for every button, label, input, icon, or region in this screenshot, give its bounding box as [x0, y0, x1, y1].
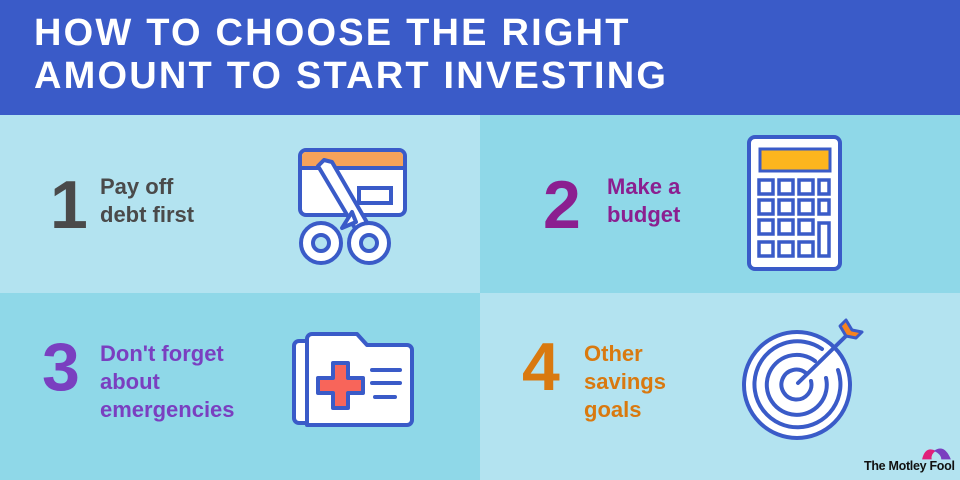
label 1: debt first	[100, 202, 194, 227]
panel: step 2	[480, 115, 960, 293]
panel: step 3	[0, 293, 480, 480]
label 3: emergencies	[100, 397, 235, 422]
label 2	[607, 174, 680, 227]
number 1: 1	[50, 167, 88, 243]
icon: target	[742, 318, 864, 440]
label 1	[100, 174, 194, 227]
panel: step 4	[480, 293, 960, 480]
title: AMOUNT TO START INVESTING	[34, 55, 668, 97]
label 1: Pay off	[100, 174, 173, 199]
icon: calculator	[747, 135, 842, 271]
header	[0, 0, 960, 115]
label 3: about	[100, 369, 160, 394]
icon: medical folder	[292, 332, 414, 427]
title	[34, 12, 668, 97]
icon: credit card with scissors	[298, 148, 407, 265]
number 2: 2	[543, 167, 581, 243]
number 3: 3	[42, 329, 80, 405]
number 4: 4	[522, 329, 560, 405]
logo: The Motley Fool	[864, 448, 955, 473]
panel: step 1	[0, 115, 480, 293]
label 4: Other	[584, 341, 643, 366]
title: HOW TO CHOOSE THE RIGHT	[34, 12, 631, 54]
label 4	[584, 341, 666, 422]
label 4: goals	[584, 397, 641, 422]
label 4: savings	[584, 369, 666, 394]
label 2: Make a	[607, 174, 680, 199]
logo: The Motley Fool: The Motley Fool	[864, 459, 955, 473]
label 3: Don't forget	[100, 341, 224, 366]
label 2: budget	[607, 202, 680, 227]
label 3	[100, 341, 235, 422]
